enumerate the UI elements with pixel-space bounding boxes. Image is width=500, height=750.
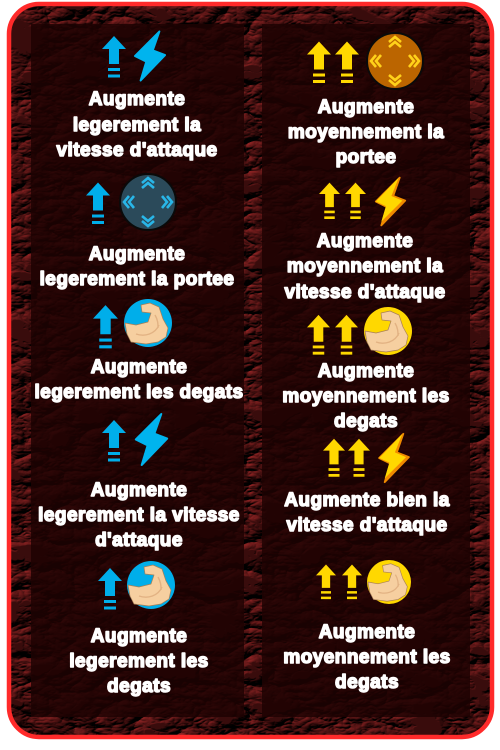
text: damage medium 2: moyennement les <box>283 647 451 668</box>
icon: blue arrow <box>86 182 110 224</box>
item: attack speed high <box>284 434 450 536</box>
icon: yellow double arrows <box>319 183 366 219</box>
icon: yellow muscle <box>364 307 412 355</box>
text: attack speed slight 1: Augmente <box>89 89 185 110</box>
text: damage slight 1: legerement les degats <box>34 382 244 403</box>
icon: yellow muscle <box>367 560 411 604</box>
item: damage medium 1 <box>282 307 450 432</box>
text: attack speed medium: moyennement la <box>287 256 443 277</box>
icon: yellow double arrows <box>307 315 358 355</box>
text: attack speed slight 1: legerement la <box>73 115 201 136</box>
text: damage medium 1: moyennement les <box>282 386 450 407</box>
text: attack speed slight 2: legerement la vitesse <box>38 505 240 526</box>
item: attack speed slight 2 <box>38 414 240 551</box>
text: range medium: moyennement la <box>288 122 444 143</box>
text: attack speed medium: Augmente <box>317 231 413 252</box>
text: damage medium 2 <box>283 622 451 693</box>
text: damage medium 1: degats <box>334 411 398 432</box>
text: attack speed medium: vitesse d'attaque <box>284 282 446 303</box>
item: attack speed slight 1 <box>56 31 218 161</box>
item: attack speed medium <box>284 178 446 303</box>
text: damage slight 1 <box>34 357 244 403</box>
text: damage slight 2 <box>69 626 209 697</box>
text: attack speed medium <box>284 231 446 303</box>
text: range medium <box>288 97 444 168</box>
text: attack speed slight 2: Augmente <box>91 480 187 501</box>
text: damage medium 2: degats <box>335 672 399 693</box>
icon: yellow double arrows <box>316 564 362 599</box>
icon: blue arrow <box>93 305 118 348</box>
icon: blue range circle <box>120 174 176 230</box>
text: attack speed high: vitesse d'attaque <box>286 515 448 536</box>
text: range slight: Augmente <box>89 244 185 265</box>
text: attack speed high: Augmente bien la <box>284 490 450 511</box>
icon: blue lightning <box>135 31 165 81</box>
item: range medium <box>288 33 444 168</box>
text: range medium: Augmente <box>318 97 414 118</box>
text: range slight: legerement la portee <box>40 269 234 290</box>
icon: yellow double arrows <box>323 439 370 477</box>
icon: yellow lightning <box>379 434 409 482</box>
icon: yellow lightning <box>376 178 405 225</box>
text: range medium: portee <box>336 147 396 168</box>
text: range slight <box>40 244 234 290</box>
icon: yellow double arrows <box>307 42 359 83</box>
text: damage slight 2: degats <box>107 676 171 697</box>
text: attack speed slight 2: d'attaque <box>95 530 183 551</box>
text: attack speed high <box>284 490 450 536</box>
icon: orange range circle <box>367 33 423 89</box>
text: damage slight 1: Augmente <box>91 357 187 378</box>
text: damage medium 1: Augmente <box>318 361 414 382</box>
icon: blue arrow <box>102 36 126 78</box>
panel: left column <box>31 24 244 717</box>
panel: right column <box>262 24 470 717</box>
item: damage slight 1 <box>34 299 244 403</box>
item: range slight <box>40 174 234 290</box>
icon: blue arrow <box>98 568 122 610</box>
text: damage slight 2: legerement les <box>69 651 209 672</box>
icon: blue arrow <box>102 420 126 462</box>
text: attack speed slight 2 <box>38 480 240 551</box>
icon: blue muscle <box>127 561 175 609</box>
text: damage medium 2: Augmente <box>319 622 415 643</box>
item: damage slight 2 <box>69 561 209 697</box>
text: damage slight 2: Augmente <box>91 626 187 647</box>
icon: blue lightning <box>136 414 167 465</box>
text: attack speed slight 1 <box>56 89 218 161</box>
item: damage medium 2 <box>283 560 451 693</box>
icon: blue muscle <box>124 299 172 347</box>
text: attack speed slight 1: vitesse d'attaque <box>56 140 218 161</box>
text: damage medium 1 <box>282 361 450 432</box>
